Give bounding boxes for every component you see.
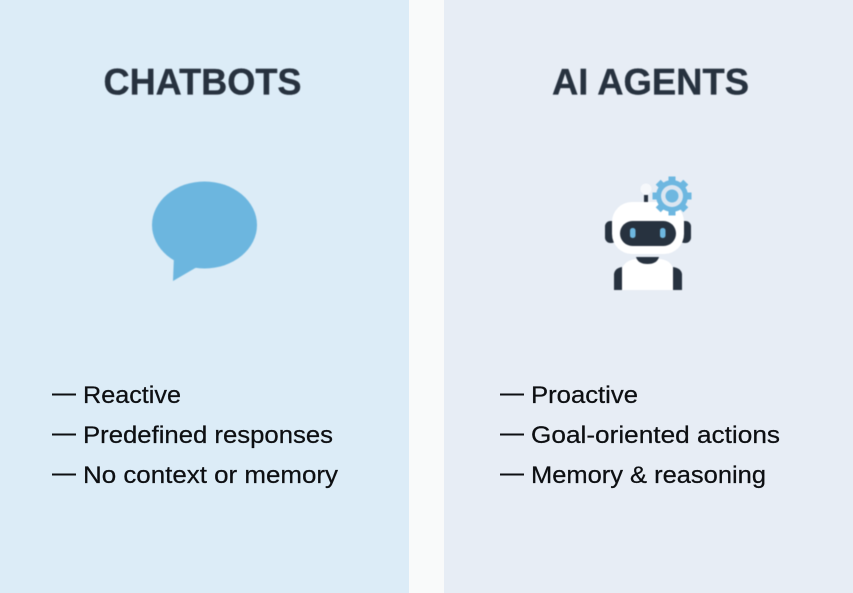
list: chatbot traits: [52, 382, 338, 489]
visor: [620, 221, 676, 246]
item: reactive: Reactive: [83, 382, 181, 409]
item: predefined responses: Predefined responses: [83, 422, 333, 449]
item: goal-oriented actions: Goal-oriented actions: [531, 422, 780, 449]
item: no context or memory: No context or memory: [83, 462, 338, 489]
heading: ai agents: AI AGENTS: [552, 62, 749, 102]
panel: chatbots: [0, 0, 409, 593]
item: memory and reasoning: Memory & reasoning: [531, 462, 766, 489]
item: proactive: Proactive: [531, 382, 638, 409]
eyes: [630, 228, 636, 238]
body: [622, 259, 673, 290]
arms: [614, 267, 622, 290]
ears: [605, 221, 617, 243]
icon: speech bubble: [152, 182, 257, 281]
heading: chatbots: CHATBOTS: [104, 62, 302, 102]
neck: [636, 257, 659, 264]
gear: [652, 176, 692, 216]
icon: robot with gear: [605, 176, 692, 290]
panel: ai agents: [444, 0, 853, 593]
antenna: [640, 184, 652, 203]
list: agent traits: [500, 382, 780, 489]
head: [612, 202, 684, 254]
